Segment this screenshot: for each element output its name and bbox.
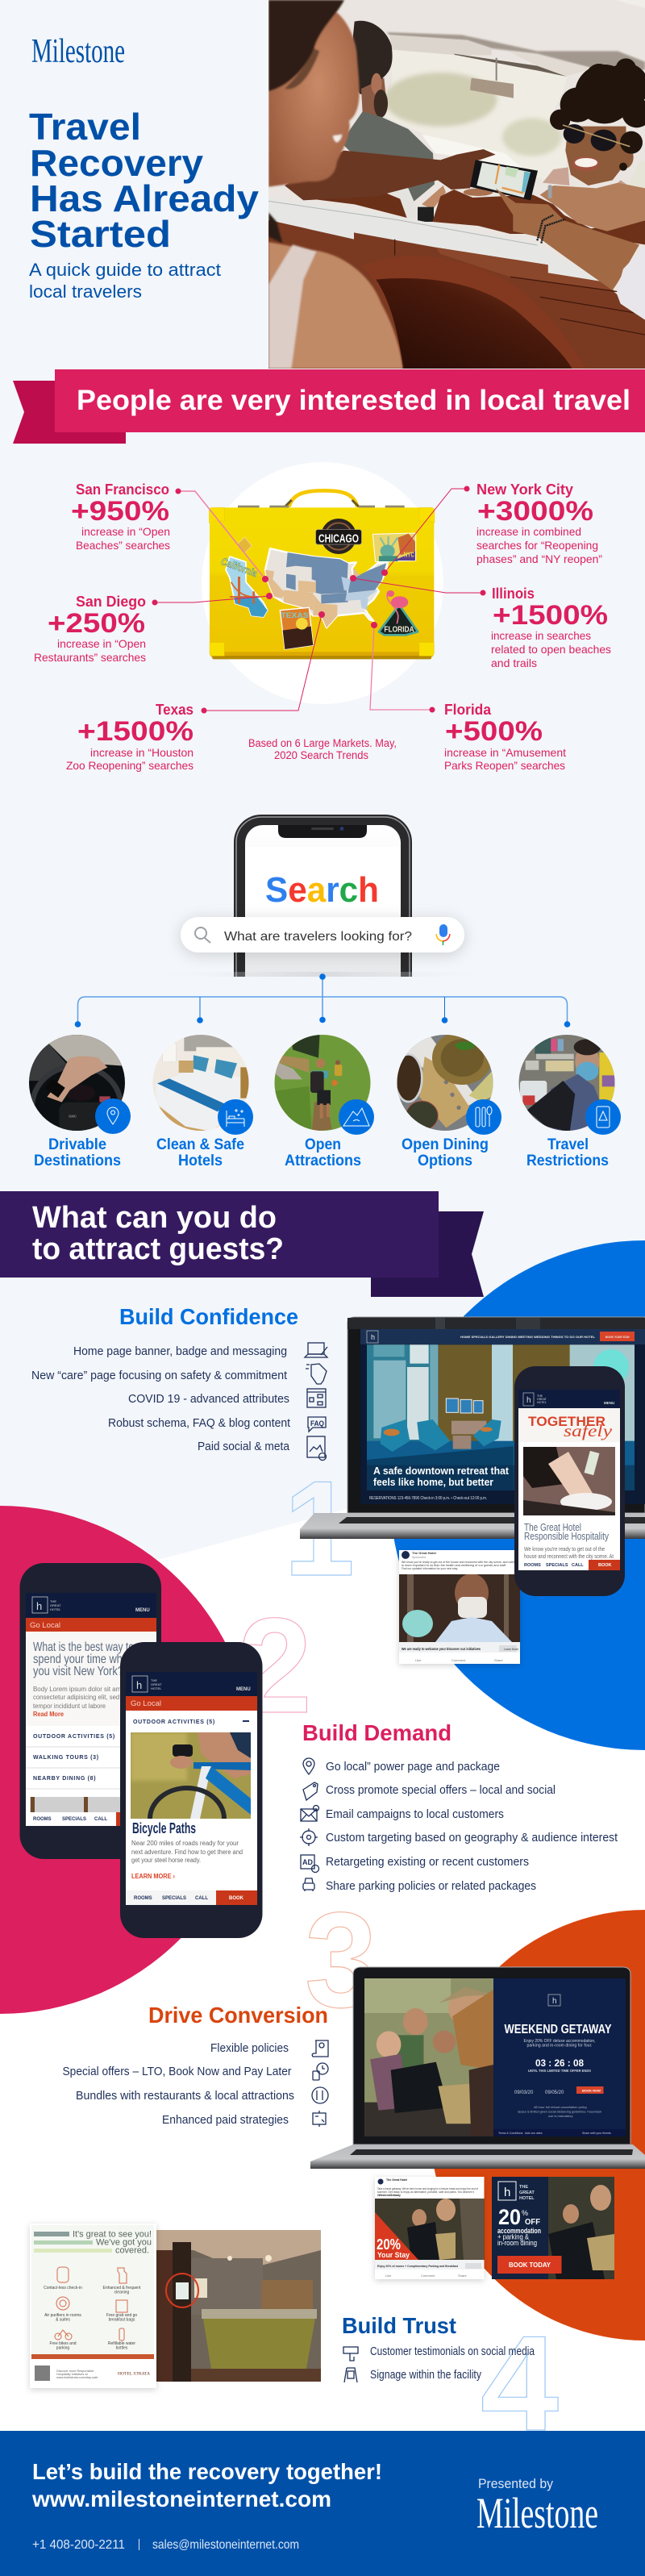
driver arm xyxy=(285,149,496,200)
sticker: Texas xyxy=(280,607,313,649)
title: Started xyxy=(30,213,171,255)
sticker: Florida xyxy=(379,590,418,635)
topic: open dining options: Options xyxy=(418,1153,472,1169)
phone: together safely: BOOK xyxy=(598,1563,612,1568)
list: drive conversion xyxy=(63,2042,294,2127)
footer: www.milestoneinternet.com xyxy=(31,2486,331,2511)
icon: cutlery xyxy=(476,1107,492,1127)
callout: New York City: phases” and “NY reopen” xyxy=(476,552,602,565)
front seats xyxy=(316,194,406,218)
phone: go local back: tempor incididunt ut labore xyxy=(33,1703,106,1710)
list: build demand: Email campaigns to local customers xyxy=(326,1808,504,1821)
phone: together safely: ROOMS xyxy=(524,1563,541,1568)
topic: open attractions: Open xyxy=(305,1136,341,1153)
topic: open attractions xyxy=(272,1032,374,1169)
laptop: weekend getaway: 48 hour full refund cancellation policy xyxy=(534,2105,587,2109)
laptop: weekend getaway: parking and in-room dining for four. xyxy=(527,2044,593,2049)
title: Recovery xyxy=(30,142,203,184)
phone: go local back: SPECIALS xyxy=(62,1817,86,1822)
callout: Florida: Parks Reopen” searches xyxy=(444,759,565,772)
icon: clock offer xyxy=(313,2063,328,2080)
hotel poster: Contact-less check-in xyxy=(44,2286,82,2290)
phone: go local back: spend your time when xyxy=(33,1653,134,1666)
laptop: hotel care page: RESERVATIONS 123-456-7890 Check-in 3:00 p.m. • Check-out 12:00 p.m. xyxy=(369,1496,487,1501)
social post: 20 percent off: 20% xyxy=(377,2236,401,2253)
footer: sales@milestoneinternet.com xyxy=(152,2538,299,2552)
list: build confidence: COVID 19 - advanced attributes xyxy=(128,1393,289,1406)
social post: masked staff: Comment xyxy=(452,1658,466,1662)
phone: bicycle paths front: ROOMS xyxy=(134,1896,152,1901)
phone: go local back: CALL xyxy=(94,1817,107,1822)
list: build demand: Cross promote special offers – local and social xyxy=(326,1784,556,1797)
laptop: weekend getaway: Add ons rates xyxy=(525,2132,543,2135)
nav bar xyxy=(367,1331,635,1343)
phone: go local back: Body Lorem ipsum dolor sit amet, xyxy=(33,1686,128,1693)
list: build confidence xyxy=(31,1345,290,1453)
callout: San Francisco: Beaches” searches xyxy=(76,539,170,552)
laptop: hotel care page xyxy=(300,1317,645,1539)
phone: bicycle paths front: next adventure. Find how to get there and xyxy=(131,1849,243,1856)
topic: drivable destinations: Destinations xyxy=(34,1153,121,1169)
callout: San Diego: San Diego xyxy=(76,594,146,610)
numeral 4: 4 xyxy=(481,2307,559,2459)
social post: masked staff: Find our updated information for your next stay. xyxy=(402,1567,458,1570)
photo: family xyxy=(364,1978,493,2137)
phone: bicycle paths front: THE xyxy=(151,1678,157,1682)
laptop: weekend getaway: WEEKEND GETAWAY xyxy=(505,2023,612,2036)
ad banner: 20 percent off: 20 xyxy=(498,2205,521,2229)
ribbon back: local travel xyxy=(13,381,126,444)
phone: go local back: HOTEL xyxy=(50,1607,61,1611)
phone with map xyxy=(470,160,538,200)
badge xyxy=(593,1349,629,1385)
subtitle: A quick guide to attract xyxy=(29,260,221,280)
title: Has Already xyxy=(30,177,259,219)
rear leather seat xyxy=(268,220,645,369)
hotel poster: HOTEL STRATA xyxy=(118,2371,150,2376)
source note xyxy=(248,737,397,761)
phone: go local back: you visit New York? xyxy=(33,1665,123,1678)
heading: Build Confidence: Build Confidence xyxy=(119,1304,298,1329)
callout: Florida: increase in “Amusement xyxy=(444,746,566,759)
phone: go local back: MENU xyxy=(135,1608,150,1613)
hotel poster: Hospitality Initiatives at xyxy=(56,2373,89,2376)
phone: go local back: ROOMS xyxy=(33,1817,52,1822)
phone: bicycle paths front: OUTDOOR ACTIVITIES (5) xyxy=(133,1719,215,1725)
hotel poster: covered. xyxy=(115,2245,149,2255)
blue backdrop circle xyxy=(390,1240,645,1750)
hotel poster: Enhanced & frequent xyxy=(103,2286,141,2290)
numeral 1: 1 xyxy=(284,1453,355,1604)
hotel poster: Refillable water xyxy=(108,2341,135,2346)
social post: 20 percent off: Like xyxy=(385,2274,392,2278)
subtitle xyxy=(29,260,221,302)
phone: bicycle paths front: Near 200 miles of roads ready for your xyxy=(131,1840,239,1847)
phone: together safely: CALL xyxy=(572,1563,584,1568)
list: drive conversion: Enhanced paid strategies xyxy=(162,2114,289,2127)
hotel poster: & suites xyxy=(56,2318,70,2323)
phone: together safely: HOTEL xyxy=(537,1401,547,1404)
woman on right xyxy=(543,167,569,185)
callout: San Francisco: increase in “Open xyxy=(81,525,170,538)
heading: Drive Conversion: Drive Conversion xyxy=(148,2003,328,2028)
phone: go local back: Read More xyxy=(33,1711,64,1718)
heading: Build Trust: Build Trust xyxy=(342,2313,456,2338)
ad banner: 20 percent off: GREAT xyxy=(519,2190,535,2195)
suitcase with map and stickers xyxy=(209,490,435,659)
list: build confidence: Paid social & meta xyxy=(198,1440,290,1453)
us map xyxy=(265,548,388,627)
phone: go local back: consectetur adipisicing elit, sed do xyxy=(33,1694,129,1701)
icon: FAQ bubble: FAQ xyxy=(310,1419,324,1428)
social post: masked staff: is more important to us than the health and wellbeing of our guests and staff. xyxy=(402,1564,506,1567)
social post: 20 percent off: #WeekendGetaway xyxy=(377,2194,401,2197)
social post: masked staff: Like xyxy=(415,1658,422,1662)
icon: ad click: AD xyxy=(302,1858,313,1866)
phone: together safely: GREAT xyxy=(537,1398,547,1401)
topic: travel restrictions: Restrictions xyxy=(526,1153,609,1169)
laptop: weekend getaway: 09/03/20 xyxy=(514,2090,534,2095)
icon: target xyxy=(300,1828,318,1846)
hotel poster: bottles xyxy=(116,2345,128,2350)
laptop: weekend getaway: Enjoy 20% OFF deluxe accommodation, xyxy=(524,2039,596,2044)
hotel poster: cleaning xyxy=(114,2290,130,2295)
ad banner: 20 percent off: HOTEL xyxy=(519,2196,535,2201)
phone: bicycle paths front: GREAT xyxy=(151,1682,162,1686)
logo: Milestone: Milestone xyxy=(31,33,125,70)
laptop: hotel care page: A safe downtown retreat that xyxy=(373,1465,510,1477)
topic: drivable destinations: Drivable xyxy=(48,1136,106,1153)
laptop: weekend getaway: h xyxy=(552,1997,557,2006)
hotel poster: www.hotelstrata.com/stay-safe xyxy=(56,2376,98,2379)
hotel poster: Air purifiers in rooms xyxy=(44,2313,81,2318)
list: build demand xyxy=(326,1761,618,1893)
callout: San Francisco: +950% xyxy=(71,496,169,527)
callout: Texas: increase in “Houston xyxy=(90,746,194,759)
footer: Let’s build the recovery together! xyxy=(32,2459,382,2484)
source note: Based on 6 Large Markets. May, xyxy=(248,737,397,749)
white seat trim xyxy=(418,220,426,222)
laptop: weekend getaway: use is mandatory xyxy=(548,2114,572,2118)
man in front seat xyxy=(349,21,393,94)
shadow under phone xyxy=(145,972,500,977)
hotel poster: breakfast bags xyxy=(109,2318,135,2323)
sticker: New York xyxy=(372,533,416,562)
callout: New York City: searches for “Reopening xyxy=(476,539,598,552)
social post: 20 percent off xyxy=(375,2177,485,2279)
phone: go local back: OUTDOOR ACTIVITIES (5) xyxy=(33,1734,115,1740)
ad banner: 20 percent off: h xyxy=(504,2186,510,2199)
phone: together safely: h xyxy=(526,1396,531,1405)
list: build demand: Share parking policies or related packages xyxy=(326,1880,536,1893)
callout: Florida: +500% xyxy=(445,716,543,747)
sticker: Texas: TEXAS xyxy=(281,611,309,619)
icon: policy scroll xyxy=(312,2040,328,2057)
callout: New York City: increase in combined xyxy=(476,525,581,538)
hotel poster: parking xyxy=(56,2345,69,2350)
phone: together safely: safely xyxy=(564,1421,613,1440)
hero lobby photo xyxy=(367,1344,635,1490)
phone: bicycle paths front: SPECIALS xyxy=(162,1896,186,1901)
callout: Texas: Zoo Reopening” searches xyxy=(66,759,194,772)
social post: masked staff: Learn More xyxy=(504,1648,518,1651)
sticker: Chicago xyxy=(316,519,361,554)
list: build trust: Customer testimonials on social media xyxy=(370,2345,535,2358)
social post: masked staff: Share xyxy=(494,1658,503,1662)
numeral 2: 2 xyxy=(238,1590,312,1741)
list: drive conversion: Bundles with restaurants & local attractions xyxy=(76,2090,294,2103)
icon: bed with sparkle xyxy=(227,1109,244,1127)
photo: cleaning xyxy=(523,1447,615,1515)
callout: Illinois xyxy=(350,575,611,669)
phone: bicycle paths front: h xyxy=(136,1679,142,1691)
callout: Florida: Florida xyxy=(444,702,492,718)
footer: Presented by xyxy=(478,2476,553,2491)
list: drive conversion: Flexible policies xyxy=(210,2042,289,2055)
social post: masked staff: We are ready to welcome you! Discover our initiatives xyxy=(402,1647,481,1651)
icon: sanitised hand xyxy=(306,1364,327,1384)
icon: signage xyxy=(344,2368,357,2382)
phone: go local back: NEARBY DINING (8) xyxy=(33,1776,96,1782)
phone: bicycle paths front xyxy=(120,1642,263,1938)
icon: location pin xyxy=(303,1758,314,1774)
list: build demand: Go local” power page and package xyxy=(326,1761,500,1774)
sticker: New York: NYC xyxy=(404,551,415,559)
icon: dining plate xyxy=(312,2087,328,2103)
footer: +1 408-200-2211 xyxy=(32,2538,125,2552)
social post: 20 percent off: Your Stay xyxy=(377,2251,410,2259)
phone: bicycle paths front: BOOK xyxy=(229,1896,244,1901)
topic: clean and safe hotels: Hotels xyxy=(178,1153,223,1169)
laptop: weekend getaway xyxy=(310,1967,645,2169)
hotel poster: It's great to see you! xyxy=(73,2229,152,2239)
icon: email xyxy=(301,1805,319,1821)
topic: drivable destinations: GMC xyxy=(69,1114,77,1118)
callout: Illinois: increase in searches xyxy=(491,629,591,642)
title xyxy=(29,106,259,255)
phone: together safely xyxy=(514,1366,625,1596)
nav bar: BOOK YOUR STAY xyxy=(605,1335,630,1339)
icon: laptop pen xyxy=(305,1343,327,1357)
banner: attract guests xyxy=(0,1191,439,1278)
hotel poster xyxy=(30,2224,156,2388)
phone: together safely: We know you're ready to get out of the xyxy=(524,1547,605,1553)
smartphone with search screen xyxy=(234,815,412,977)
icon: FAQ bubble xyxy=(308,1417,326,1432)
icon: mountains xyxy=(343,1108,369,1126)
phone: go local back: Go Local xyxy=(30,1621,60,1630)
list: build demand: Retargeting existing or recent customers xyxy=(326,1856,529,1869)
phone: bicycle paths front: get your steel horse ready. xyxy=(131,1857,201,1864)
laptop: weekend getaway: 09/05/20 xyxy=(545,2090,564,2095)
phone: go local back: THE xyxy=(50,1599,56,1603)
callout: San Francisco xyxy=(71,481,268,582)
phone: together safely: Responsible Hospitality xyxy=(524,1531,610,1542)
white circle behind suitcase xyxy=(202,462,443,704)
topic: travel restrictions: Travel xyxy=(547,1136,589,1153)
hero photo: friends in a car with phone map xyxy=(268,0,645,369)
banner: local travel: People are very interested in local travel xyxy=(77,385,630,416)
ribbon back: attract guests xyxy=(371,1211,484,1297)
icon: ad click xyxy=(301,1855,319,1873)
phone: bicycle paths front: HOTEL xyxy=(151,1686,162,1690)
search word: Search xyxy=(265,870,379,910)
heading: Build Demand: Build Demand xyxy=(302,1720,452,1745)
laptop: weekend getaway: Share with your friends xyxy=(582,2132,611,2135)
social post: 20 percent off: Enjoy 20% of rooms + Complimentary Parking and Breakfast xyxy=(377,2265,459,2268)
pink backdrop circle xyxy=(0,1506,254,2014)
social post: masked staff xyxy=(399,1550,520,1664)
list: build confidence: Home page banner, badge and messaging xyxy=(73,1345,287,1358)
topic: clean and safe hotels: Clean & Safe xyxy=(156,1136,244,1153)
callout: San Diego: +250% xyxy=(48,608,145,639)
topic: travel restrictions xyxy=(516,1032,621,1169)
banner: attract guests: What can you do xyxy=(32,1201,277,1235)
ad banner: 20 percent off: THE xyxy=(519,2185,528,2190)
ad banner: 20 percent off: OFF xyxy=(525,2218,540,2227)
hotel poster: Free bikes and xyxy=(49,2341,77,2346)
phone: go local back: h xyxy=(36,1600,42,1612)
icon: price tag xyxy=(303,1782,318,1800)
foreground woman xyxy=(268,0,403,369)
list: drive conversion: Special offers – LTO, Book Now and Pay Later xyxy=(63,2065,292,2078)
phone: together safely: MENU xyxy=(604,1401,614,1405)
phone: together safely: THE xyxy=(537,1394,543,1398)
phone: bicycle paths front: CALL xyxy=(195,1896,208,1901)
social post: 20 percent off: summer. Get ready to enjoy an alternative, portable, safe and parks. You deserve it xyxy=(377,2190,474,2194)
laptop: weekend getaway: BOOK NOW xyxy=(582,2089,601,2092)
phone: go local back: What is the best way to xyxy=(33,1640,134,1654)
nav bar: HOME SPECIALS GALLERY DINING MEETING WEDDING THINGS TO DO OUR HOTEL xyxy=(460,1335,596,1339)
ad banner: 20 percent off: accommodation xyxy=(497,2227,541,2236)
phone: bicycle paths front: Go Local xyxy=(131,1699,161,1708)
connector tree xyxy=(75,973,570,1027)
callout: New York City: New York City xyxy=(476,481,573,498)
topic: open dining options: Open Dining xyxy=(402,1136,489,1153)
banner: attract guests: to attract guests? xyxy=(32,1232,284,1266)
laptop: weekend getaway: Terms & Conditions xyxy=(498,2132,523,2135)
callout: Texas xyxy=(66,611,325,772)
topic: clean and safe hotels xyxy=(151,1032,253,1169)
callout: Texas: Texas xyxy=(156,702,194,718)
laptop: weekend getaway: UNTIL THIS LIMITED TIME OFFER ENDS xyxy=(528,2069,591,2073)
social post: masked staff: The Great Hotel xyxy=(412,1551,436,1555)
icon: image ad xyxy=(307,1436,326,1460)
list: build trust xyxy=(370,2345,535,2382)
callout: New York City: +3000% xyxy=(477,496,593,527)
phone: bicycle paths front: MENU xyxy=(236,1687,251,1692)
orange backdrop circle xyxy=(430,1910,645,2340)
topic: drivable destinations xyxy=(24,1032,131,1169)
hotel poster: We've got you xyxy=(96,2237,152,2247)
callout: San Diego: Restaurants” searches xyxy=(34,651,146,664)
sticker: road sign xyxy=(237,537,252,553)
icon: strategy board xyxy=(313,2111,326,2127)
callout: Florida xyxy=(370,622,566,772)
phone: go local back xyxy=(19,1563,161,1859)
phone: together safely: TOGETHER xyxy=(528,1414,605,1429)
hotel poster: Free grab and go xyxy=(106,2313,137,2318)
callout: Texas: +1500% xyxy=(77,716,194,747)
subtitle: local travelers xyxy=(29,281,142,302)
icon: pin xyxy=(107,1107,119,1124)
icon: phone alert xyxy=(597,1107,610,1128)
source note: 2020 Search Trends xyxy=(274,749,368,761)
phone: together safely: The Great Hotel xyxy=(524,1522,581,1533)
search bar: What are travelers looking for? xyxy=(224,930,412,944)
ad banner: 20 percent off xyxy=(492,2177,614,2279)
white lower background xyxy=(0,1428,645,2431)
photo: cyclist xyxy=(131,1732,251,1819)
ad banner: 20 percent off: % xyxy=(522,2209,528,2217)
ad banner: 20 percent off: in-room dining xyxy=(497,2239,537,2248)
laptop: weekend getaway: Space is limited given social distancing guidelines. Facemask xyxy=(518,2110,601,2113)
icon: car xyxy=(303,1878,314,1891)
icon: testimonials xyxy=(343,2347,358,2361)
callout: Illinois: Illinois xyxy=(492,586,535,602)
pointing arm xyxy=(496,188,639,290)
icon: microphone xyxy=(436,924,450,945)
laptop: hotel care page: feels like home, but better xyxy=(373,1476,493,1488)
title: Travel xyxy=(29,106,141,148)
social post: 20 percent off: Share xyxy=(458,2274,467,2278)
callout: Illinois: related to open beaches xyxy=(491,643,611,656)
topic: open attractions: Attractions xyxy=(285,1153,361,1169)
topic: open dining options xyxy=(395,1031,501,1169)
list: build confidence: New “care” page focusing on safety & commitment xyxy=(31,1369,287,1382)
callout: San Francisco: San Francisco xyxy=(76,481,169,498)
phone: bicycle paths front: Bicycle Paths xyxy=(132,1820,196,1836)
list: build confidence: Robust schema, FAQ & blog content xyxy=(108,1417,290,1430)
sticker: California: California xyxy=(219,556,259,579)
banner: local travel xyxy=(55,369,645,432)
ad banner: 20 percent off: BOOK TODAY xyxy=(509,2261,551,2269)
hotel poster: Discover more Responsible xyxy=(56,2370,94,2373)
phone: bicycle paths front: LEARN MORE › xyxy=(131,1873,175,1880)
phone: together safely: SPECIALS xyxy=(546,1563,568,1568)
sticker: California xyxy=(219,556,268,617)
callout: San Diego xyxy=(34,593,273,664)
lobby photo with signage xyxy=(156,2230,321,2382)
numeral 3: 3 xyxy=(305,1884,377,2036)
callout: Illinois: +1500% xyxy=(493,600,608,631)
list: build trust: Signage within the facility xyxy=(370,2369,482,2382)
social post: 20 percent off: Take a travel getaway. We've been home and longing for a leisure break and enjoy the end of xyxy=(377,2187,478,2190)
nav bar: h xyxy=(371,1333,375,1341)
icon: site structure xyxy=(307,1389,326,1407)
social post: masked staff: We know you're ready to get out of the house and reconnect with the city scene, and nothing xyxy=(402,1561,518,1564)
laptop: weekend getaway: 03 : 26 : 08 xyxy=(535,2057,584,2069)
list: build demand: Custom targeting based on geography & audience interest xyxy=(326,1832,618,1844)
callout: San Diego: increase in “Open xyxy=(57,637,146,650)
ad banner: 20 percent off: + parking & xyxy=(497,2232,530,2242)
phone: go local back: GREAT xyxy=(50,1603,61,1607)
social post: masked staff: Sponsored xyxy=(412,1556,426,1559)
phone: together safely: house and reconnect with the city scene. At xyxy=(524,1554,614,1560)
social post: 20 percent off: Comment xyxy=(421,2274,435,2278)
search bar xyxy=(181,917,464,952)
icon: magnifier xyxy=(195,927,210,943)
sticker: Florida: FLORIDA xyxy=(384,626,414,635)
callout: Illinois: and trails xyxy=(491,657,537,669)
callout: New York City xyxy=(381,481,602,576)
phone: go local back: WALKING TOURS (3) xyxy=(33,1755,99,1761)
footer xyxy=(0,2431,645,2576)
sticker: Chicago: CHICAGO xyxy=(318,532,359,545)
social post: 20 percent off: The Great Hotel xyxy=(386,2178,407,2182)
